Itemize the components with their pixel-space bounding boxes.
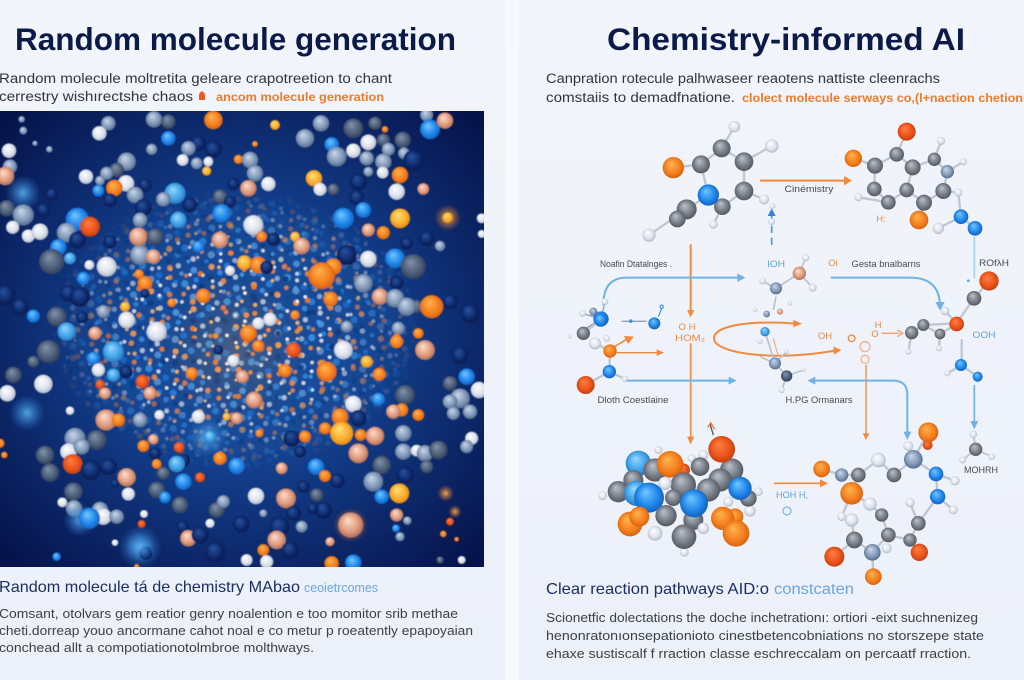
intro text: Canpration rotecule palhwaseer reaotens nattiste cleenrachs [546,71,940,86]
arrows: lower pathway [612,320,978,487]
molecule: centre lower [757,327,805,393]
icon: flame marker [199,91,205,100]
description text: ehaxe sustiscalf f rraction classe eschreccalam on percaatf rraction. [546,646,971,661]
description text: henonratonıonsepationioto cinestbetencobniations no storszepe state [546,628,984,643]
panel: random molecule generation [0,0,505,680]
title: random molecule generation: Random molecule generation [15,21,456,57]
molecule cluster: bottom left [598,423,763,557]
labels: upper pathway: Noafin Dtatalnges . [600,259,672,269]
labels: upper pathway: Gesta bnalbarns [852,259,921,269]
intro text: cerrestry wishırectshe chaos [0,89,193,104]
labels: lower pathway: MOHRH [964,465,998,475]
panel: chemistry-informed AI [519,0,1024,680]
labels: lower pathway: HOM₂ [675,333,705,344]
description text [546,610,984,661]
labels: lower pathway: H.PG Ormanars [786,395,853,405]
highlighted label: ancom molecule generation [216,90,384,104]
description text: cheti.dorreap youo ancormane cahot noal e co metur p roeatently epapoyaian [0,623,473,638]
molecule: upper left [642,121,778,242]
molecule: lower left fragment [568,313,628,394]
highlighted label: clolect molecule serways co,(l+naction chetions [742,91,1024,105]
subheading: Clear reaction pathways AID:o [546,581,769,598]
description text: conchead allt a compotiationotolmbroe molthways. [0,640,314,655]
labels: lower pathway [598,320,998,515]
labels: upper pathway: Oi [828,258,838,269]
intro text [0,71,392,104]
molecule: right fragment [848,317,983,382]
subheading: constcaten [774,581,854,598]
molecule: mid left top [579,298,663,330]
labels: lower pathway: Dloth Coestlaine [598,395,668,405]
molecule: centre pathway [753,254,817,317]
labels: lower pathway: HOH H, [776,490,808,501]
labels: lower pathway: OOH [972,330,996,341]
labels: upper pathway [600,184,1009,270]
molecule: far right small [959,431,995,463]
labels: upper pathway: Cinémistry [784,184,834,194]
image: chaotic molecule cloud [0,108,487,571]
molecule: upper right [845,123,982,236]
labels: lower pathway: O [871,329,879,340]
intro text [546,71,940,105]
title: chemistry-informed AI: Chemistry-informed AI [607,21,965,57]
labels: lower pathway: O H [679,322,696,333]
molecule: mid right top [923,271,999,325]
labels: upper pathway: IOH [767,259,785,270]
description text [0,606,473,655]
description text: Scionetfic dolectations the doche inchetrationı: ortiori -eixt suchnenizeg [546,610,978,625]
pathway diagram [568,121,1009,585]
subheading [546,581,854,598]
intro text: comstaiis to demadfnatione. [546,90,735,105]
labels: lower pathway: OH [818,331,832,342]
labels: upper pathway: ROfλH [979,258,1009,268]
subheading: ceoietrcomes [304,580,378,595]
molecule: bottom right [813,422,960,585]
description text: Comsant, otolvars gem reatior genry noalention e too momitor srib methae [0,606,458,621]
labels: upper pathway: H: [876,214,886,225]
intro text: Random molecule moltretita geleare crapotreetion to chant [0,71,392,86]
arrows: upper pathway [603,176,974,317]
subheading: Random molecule tá de chemistry MAbao [0,579,300,596]
labels: lower pathway: H [875,320,882,331]
